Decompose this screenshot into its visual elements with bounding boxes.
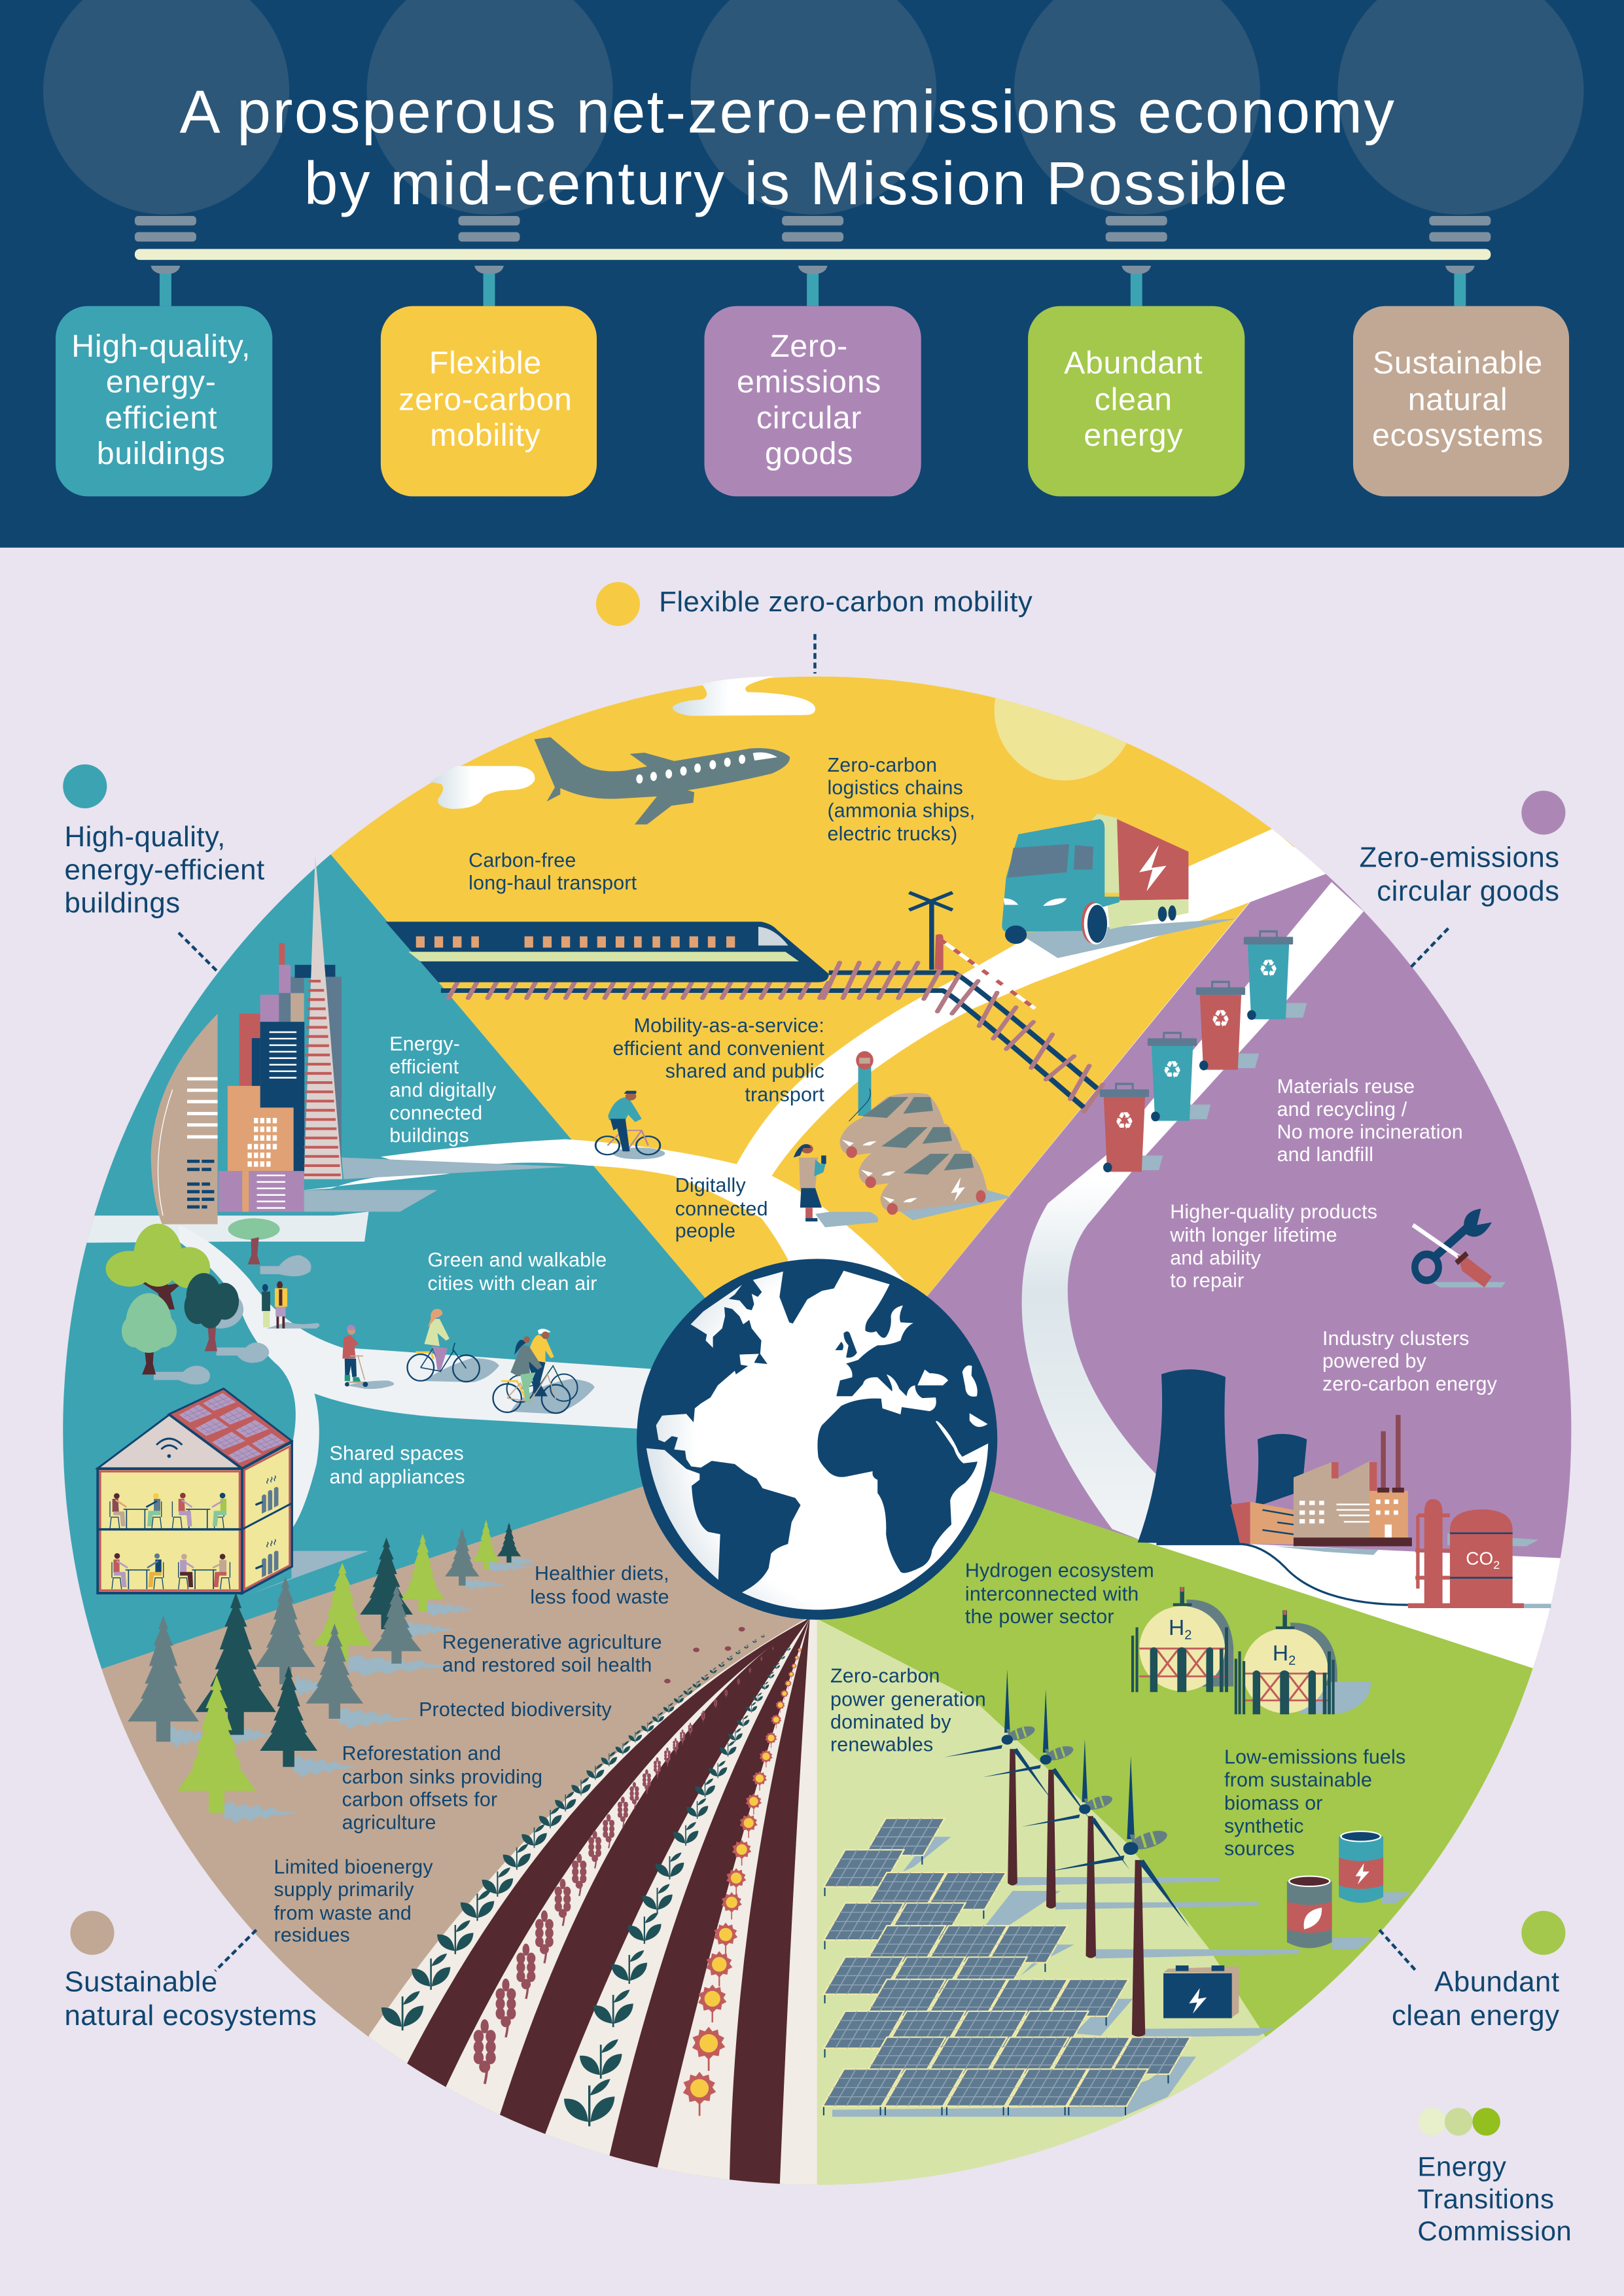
icon: kid on scooter <box>342 1325 394 1389</box>
text: digitally connected people: people <box>675 1219 735 1242</box>
icon: green trees <box>106 1224 269 1384</box>
icon: solar roof <box>169 1389 292 1468</box>
logo: Energy Transitions Commission: Transitions <box>1417 2183 1554 2214</box>
icon: power cable <box>1156 1544 1408 1605</box>
icon: pedestrians <box>262 1282 320 1329</box>
text: healthier diets: less food waste <box>530 1586 669 1608</box>
box: flexible mobility: mobility <box>430 418 541 453</box>
box: circular goods <box>705 306 921 496</box>
panel: high-quality buildings <box>97 853 607 1593</box>
rail track <box>441 963 1103 1111</box>
label: CO2: CO <box>1466 1549 1493 1568</box>
field: cream <box>344 1618 817 2211</box>
text: healthier diets: Healthier diets, <box>535 1562 669 1585</box>
text: mobility as a service: shared and public <box>665 1060 824 1083</box>
text: hydrogen ecosystem: interconnected with <box>965 1583 1139 1605</box>
text: logistics chains: logistics chains <box>827 777 963 799</box>
box: clean energy: Abundant <box>1064 346 1203 380</box>
icon: recycling bins: ♻ <box>1211 1006 1230 1033</box>
panel: abundant clean energy <box>822 1560 1411 2117</box>
text: higher-quality products: to repair <box>1170 1270 1244 1292</box>
text: digitally connected people: connected <box>675 1198 768 1220</box>
icon: fuel barrels <box>1287 1831 1411 1949</box>
box: flexible mobility <box>381 306 597 496</box>
key: high-quality buildings: energy-efficient <box>64 853 265 886</box>
icon: panel and turbine shadows <box>832 1837 1299 2117</box>
walls <box>97 1442 292 1593</box>
key: natural ecosystems: Sustainable <box>64 1966 218 1998</box>
icon: radiators <box>256 1476 278 1577</box>
box: high-quality buildings <box>56 306 272 496</box>
text: power generation: renewables <box>830 1734 933 1756</box>
lightbulb: natural ecosystems <box>1337 0 1583 306</box>
text: low-emissions fuels: from sustainable <box>1224 1768 1372 1791</box>
box: circular goods: circular <box>756 400 862 435</box>
illustration: bins, tools, industry <box>1100 931 1551 1608</box>
logo: Energy Transitions Commission <box>1417 2108 1572 2246</box>
panel: sustainable natural ecosystems <box>128 1520 802 2126</box>
sector: purple <box>927 874 1572 1558</box>
label: CO2: 2 <box>1493 1558 1500 1571</box>
icon: globe <box>637 1259 997 1620</box>
sun <box>995 698 1127 780</box>
sector: yellow <box>330 677 1295 1298</box>
text: mobility as a service: Mobility-as-a-service: <box>634 1014 824 1037</box>
text: walkable cities: cities with clean air <box>428 1272 597 1295</box>
text: limited bioenergy: supply primarily <box>274 1878 414 1901</box>
text: logistics chains: electric trucks) <box>827 823 957 845</box>
text: higher-quality products: Higher-quality products <box>1170 1200 1377 1223</box>
icon: recycling bins <box>1100 931 1307 1172</box>
box: natural ecosystems: ecosystems <box>1372 418 1544 453</box>
train <box>385 922 829 982</box>
sector: teal <box>63 854 705 1669</box>
text: hydrogen ecosystem: the power sector <box>965 1605 1114 1628</box>
text: materials reuse: No more incineration <box>1277 1121 1463 1143</box>
text: energy-efficient buildings: connected <box>389 1102 482 1124</box>
key: high-quality buildings <box>63 764 265 971</box>
icon: cars <box>839 1093 1012 1220</box>
key: circular goods: circular goods <box>1377 875 1560 907</box>
text: hydrogen ecosystem: Hydrogen ecosystem <box>965 1560 1154 1582</box>
box: circular goods: emissions <box>737 365 881 400</box>
icon: people at tables <box>110 1493 230 1589</box>
box: clean energy: clean <box>1095 382 1173 417</box>
icon: couple on bikes <box>493 1329 595 1414</box>
text: reforestation: Reforestation and <box>342 1742 501 1765</box>
icon: cooling towers <box>1138 1369 1307 1545</box>
illustration: house <box>97 1389 292 1593</box>
icon: hydrogen tanks <box>1131 1587 1371 1714</box>
text: long-haul transport: long-haul transport <box>468 872 637 894</box>
text: higher-quality products: with longer lifetime <box>1169 1224 1337 1246</box>
key: high-quality buildings: buildings <box>64 887 181 919</box>
icon: plane <box>535 737 790 825</box>
illustration: forest and fields <box>128 1520 802 2126</box>
icon: wind turbines <box>944 1670 1190 2037</box>
label: H2 tank two: H <box>1273 1641 1288 1666</box>
header banner <box>0 0 1624 548</box>
box: clean energy <box>1028 306 1244 496</box>
text: walkable cities: Green and walkable <box>428 1249 607 1271</box>
icon: charging post <box>849 1051 874 1121</box>
text: logistics chains: (ammonia ships, <box>827 799 975 821</box>
box: circular goods: goods <box>765 436 853 471</box>
box: high-quality buildings: High-quality, <box>71 329 251 364</box>
sector: light green <box>816 1618 1274 2211</box>
text: power generation: dominated by <box>830 1711 951 1733</box>
icon: gable <box>97 1415 241 1468</box>
icon: crop row of legumes <box>564 1646 790 2126</box>
roads <box>87 829 1364 1594</box>
key: natural ecosystems: natural ecosystems <box>64 2000 317 2032</box>
sector: green <box>819 1491 1533 2185</box>
text: materials reuse: Materials reuse <box>1277 1075 1415 1098</box>
text: regenerative agriculture: and restored soil health <box>442 1654 652 1676</box>
text: limited bioenergy: from waste and <box>274 1902 412 1924</box>
box: natural ecosystems: natural <box>1408 382 1508 417</box>
icon: battery <box>1163 1965 1239 2018</box>
sector: tan <box>101 1486 817 2185</box>
illustration: truck <box>1002 814 1238 958</box>
text: reforestation: carbon offsets for <box>342 1789 497 1811</box>
key: circular goods: Zero-emissions <box>1360 841 1560 873</box>
box: high-quality buildings: efficient <box>105 400 217 435</box>
text: power generation: Zero-carbon <box>830 1665 940 1687</box>
text: industry clusters: Industry clusters <box>1322 1327 1470 1350</box>
logo: Energy Transitions Commission: Energy <box>1417 2151 1506 2182</box>
key: flexible mobility: Flexible zero-carbon mobility <box>659 586 1033 618</box>
icon: crop row of seedlings <box>381 1634 765 2030</box>
text: energy-efficient buildings: efficient <box>389 1056 459 1078</box>
title: A prosperous net-zero-emissions economy <box>180 77 1396 145</box>
icon: crop row of wheat <box>474 1647 773 2084</box>
icon: CO2 capture tank <box>1408 1499 1551 1608</box>
label: H2 tank one: 2 <box>1184 1628 1192 1643</box>
icon: recycling bins: ♻ <box>1163 1057 1182 1084</box>
text: shared spaces: and appliances <box>330 1465 465 1488</box>
illustration: cyclists <box>342 1309 595 1414</box>
text: reforestation: carbon sinks providing <box>342 1766 542 1788</box>
text: low-emissions fuels: Low-emissions fuels <box>1224 1746 1405 1768</box>
icon: level crossing <box>909 893 1035 1009</box>
panel: flexible zero-carbon mobility <box>385 676 1238 1242</box>
box: circular goods: Zero- <box>770 329 848 364</box>
text: energy-efficient buildings: buildings <box>389 1124 469 1147</box>
text: mobility as a service: efficient and convenient <box>613 1037 824 1060</box>
text: materials reuse: and landfill <box>1277 1143 1373 1166</box>
text: regenerative agriculture: Regenerative agriculture <box>442 1631 662 1653</box>
key: natural ecosystems <box>64 1911 317 2032</box>
key: high-quality buildings: High-quality, <box>64 821 226 853</box>
text: low-emissions fuels: synthetic <box>1224 1815 1304 1837</box>
icon: crop row of sunflowers <box>683 1648 802 2116</box>
key: clean energy <box>1379 1911 1565 2032</box>
label: H2 tank one: H <box>1169 1616 1184 1640</box>
box: natural ecosystems: Sustainable <box>1373 346 1543 380</box>
icon: wrench and screwdriver <box>1413 1209 1506 1287</box>
key: clean energy: Abundant <box>1434 1966 1560 1998</box>
field: furrows <box>398 1618 810 2204</box>
icon: person with phone <box>794 1144 878 1227</box>
title: by mid-century is Mission Possible <box>304 149 1289 217</box>
text: industry clusters: powered by <box>1322 1350 1427 1372</box>
icon: woman on bike <box>407 1309 499 1382</box>
icon: skyline <box>151 853 342 1224</box>
disc sectors <box>63 677 1572 2185</box>
icon: street tree <box>228 1218 311 1276</box>
box: natural ecosystems <box>1353 306 1569 496</box>
label: H2 tank two: 2 <box>1288 1654 1296 1668</box>
text: energy-efficient buildings: Energy- <box>389 1033 460 1055</box>
connecting bar <box>135 249 1491 260</box>
text: industry clusters: zero-carbon energy <box>1322 1372 1498 1395</box>
panel: zero-emissions circular goods <box>1100 931 1551 1608</box>
text: reforestation: agriculture <box>342 1811 436 1833</box>
text: limited bioenergy: Limited bioenergy <box>274 1856 433 1878</box>
text: long-haul transport: Carbon-free <box>468 849 576 871</box>
icon: tree shadows <box>169 1556 539 1823</box>
box: flexible mobility: zero-carbon <box>398 382 573 417</box>
text: shared spaces: Shared spaces <box>330 1443 464 1465</box>
icon: recycling bins: ♻ <box>1115 1107 1134 1135</box>
text: materials reuse: and recycling / <box>1277 1098 1407 1121</box>
text: mobility as a service: transport <box>745 1083 824 1105</box>
text: low-emissions fuels: sources <box>1224 1838 1295 1860</box>
key: clean energy: clean energy <box>1392 2000 1560 2032</box>
box: clean energy: energy <box>1084 418 1183 453</box>
illustration: energy systems <box>822 1587 1411 2117</box>
box: high-quality buildings: energy- <box>106 365 216 400</box>
text: higher-quality products: and ability <box>1170 1247 1262 1269</box>
box: flexible mobility: Flexible <box>429 346 542 380</box>
key: circular goods <box>1360 791 1565 969</box>
box: high-quality buildings: buildings <box>97 436 226 471</box>
icon: cyclist <box>595 1091 665 1159</box>
illustration: city and trees <box>106 853 342 1384</box>
lightbulb: clean energy <box>1014 0 1260 306</box>
lightbulb: circular goods <box>690 0 936 306</box>
text: energy-efficient buildings: and digitally <box>389 1079 497 1102</box>
text: logistics chains: Zero-carbon <box>827 754 937 776</box>
icon: wifi <box>157 1439 181 1458</box>
logo: Energy Transitions Commission: Commission <box>1417 2215 1572 2246</box>
illustrations: yellow panel <box>385 676 1103 1227</box>
key: flexible mobility <box>596 582 1033 673</box>
icon: pine trees <box>128 1520 521 1813</box>
icon: solar panels <box>822 1818 1191 2115</box>
text: low-emissions fuels: biomass or <box>1224 1792 1323 1814</box>
lightbulb: high-quality buildings <box>43 0 289 306</box>
icon: bees <box>664 1627 745 1683</box>
text: protected biodiversity: Protected biodiversity <box>419 1698 612 1721</box>
icon: factory <box>1230 1415 1412 1555</box>
lightbulb: flexible mobility <box>367 0 613 306</box>
icon: clouds <box>430 676 815 809</box>
text: power generation: power generation <box>830 1688 986 1710</box>
text: digitally connected people: Digitally <box>675 1174 746 1196</box>
icon: recycling bins: ♻ <box>1259 955 1278 982</box>
text: limited bioenergy: residues <box>274 1924 350 1946</box>
